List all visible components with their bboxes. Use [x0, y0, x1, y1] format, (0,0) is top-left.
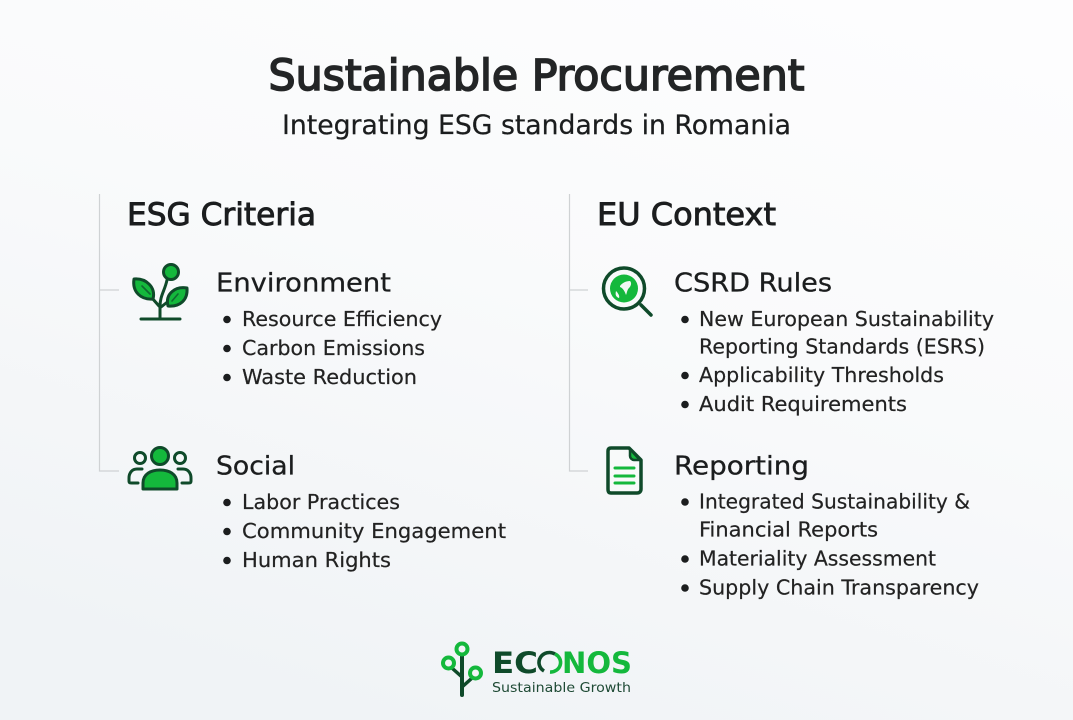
list: Reporting items: Integrated Sustainability &: [699, 490, 970, 514]
list: Reporting items: [681, 490, 979, 600]
list: Social items: Community Engagement: [242, 519, 506, 543]
heading: Environment: Environment: [216, 268, 391, 298]
list: CSRD items: [681, 307, 994, 416]
block: Environment: [216, 268, 442, 389]
list: Environment items: Resource Efficiency: [242, 307, 442, 331]
list: Environment items: Carbon Emissions: [242, 336, 425, 360]
title: Sustainable Procurement: [268, 51, 804, 101]
list: CSRD items: Applicability Thresholds: [699, 363, 944, 387]
block: Social: [216, 452, 506, 572]
list: Social items: [223, 490, 506, 572]
logo wordmark: EC: [492, 646, 538, 680]
list: Social items: Labor Practices: [242, 490, 400, 514]
list: Reporting items: Supply Chain Transparency: [699, 576, 979, 600]
list: CSRD items: Reporting Standards (ESRS): [699, 334, 985, 358]
icon: logo tree: [443, 644, 481, 695]
panel: EU Context: [570, 194, 994, 600]
block: CSRD Rules: [674, 268, 994, 416]
logo: Econos: [443, 644, 632, 696]
list: Reporting items: Financial Reports: [699, 518, 878, 542]
list: Environment items: [223, 307, 442, 389]
list: Environment items: Waste Reduction: [242, 365, 417, 389]
logo wordmark: Sustainable Growth: [492, 680, 631, 696]
list: CSRD items: Audit Requirements: [699, 392, 907, 416]
icon: magnifier with globe: [604, 268, 651, 315]
heading: CSRD Rules: CSRD Rules: [674, 268, 832, 298]
list: Reporting items: Materiality Assessment: [699, 546, 936, 570]
list: Social items: Human Rights: [242, 548, 391, 572]
icon: plant: [134, 264, 187, 319]
icon: people: [129, 448, 191, 489]
heading: ESG Criteria: ESG Criteria: [127, 197, 316, 233]
heading: Reporting: Reporting: [674, 452, 809, 482]
list: CSRD items: New European Sustainability: [699, 307, 994, 331]
logo wordmark: [492, 646, 632, 696]
subtitle: Integrating ESG standards in Romania: [282, 110, 791, 141]
tree connector: ESG Criteria: [100, 194, 119, 471]
tree connector: EU Context: [570, 194, 588, 471]
heading: EU Context: EU Context: [597, 197, 776, 233]
logo wordmark: NOS: [562, 646, 632, 680]
panel: ESG Criteria: [100, 194, 506, 572]
heading: Social: Social: [216, 452, 295, 482]
icon: document: [608, 448, 641, 493]
block: Reporting: [674, 452, 979, 600]
